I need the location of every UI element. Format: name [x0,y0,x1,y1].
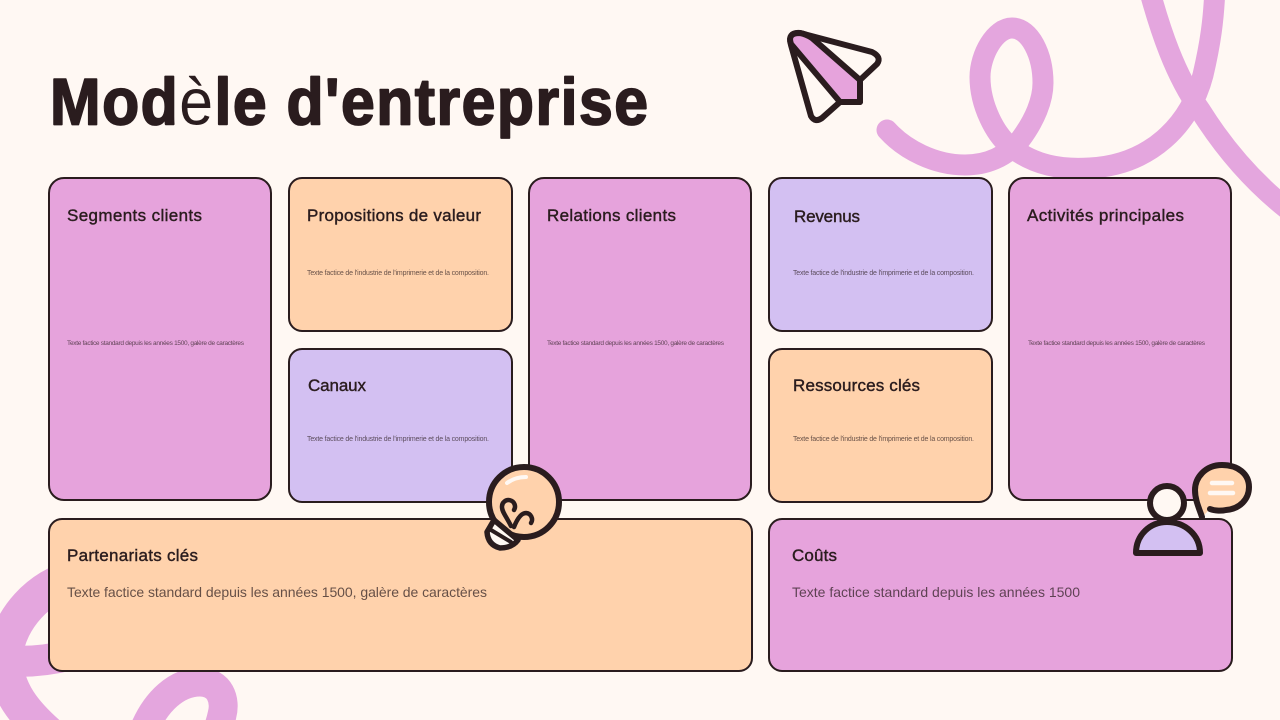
panel: canaux [289,349,512,502]
heading: coûts: Coûts [792,546,837,565]
heading: partenariats clés: Partenariats clés [67,546,198,565]
heading: propositions de valeur: Propositions de valeur [307,206,481,225]
title: Modèle d'entreprise [50,66,648,139]
panel: ressources clés [769,349,992,502]
text: canaux: Texte factice de l'industrie de l'imprimerie et de la composition. [307,436,489,443]
panel: activités principales [1009,178,1231,500]
text: revenus: Texte factice de l'industrie de l'imprimerie et de la composition. [793,270,974,277]
panel: propositions de valeur [289,178,512,331]
text: ressources clés: Texte factice de l'industrie de l'imprimerie et de la composition. [793,436,974,443]
decorative swirl: bottom left [0,578,223,720]
panel: coûts [769,519,1232,671]
decorative swirl: top right [887,0,1280,215]
panel: segments clients [49,178,271,500]
heading: relations clients: Relations clients [547,206,676,225]
heading: revenus: Revenus [794,207,860,226]
heading: segments clients: Segments clients [67,206,202,225]
heading: activités principales: Activités principales [1027,206,1184,225]
icon: paper plane [790,33,879,120]
text: activités principales: Texte factice standard depuis les années 1500, galère de caractères [1028,340,1206,347]
icon: light bulb [487,467,559,548]
heading: canaux: Canaux [308,376,366,395]
text: propositions de valeur: Texte factice de l'industrie de l'imprimerie et de la composition. [307,270,489,277]
text: segments clients: Texte factice standard depuis les années 1500, galère de caractères [67,340,245,347]
icon: person with speech bubble [1136,465,1249,553]
panel: revenus [769,178,992,331]
panel: partenariats clés [49,519,752,671]
text: relations clients: Texte factice standard depuis les années 1500, galère de caractères [547,340,725,347]
text: coûts: Texte factice standard depuis les années 1500 [792,584,1080,600]
text: partenariats clés: Texte factice standard depuis les années 1500, galère de caractères [67,584,487,600]
heading: ressources clés: Ressources clés [793,376,920,395]
panel: relations clients [529,178,751,500]
